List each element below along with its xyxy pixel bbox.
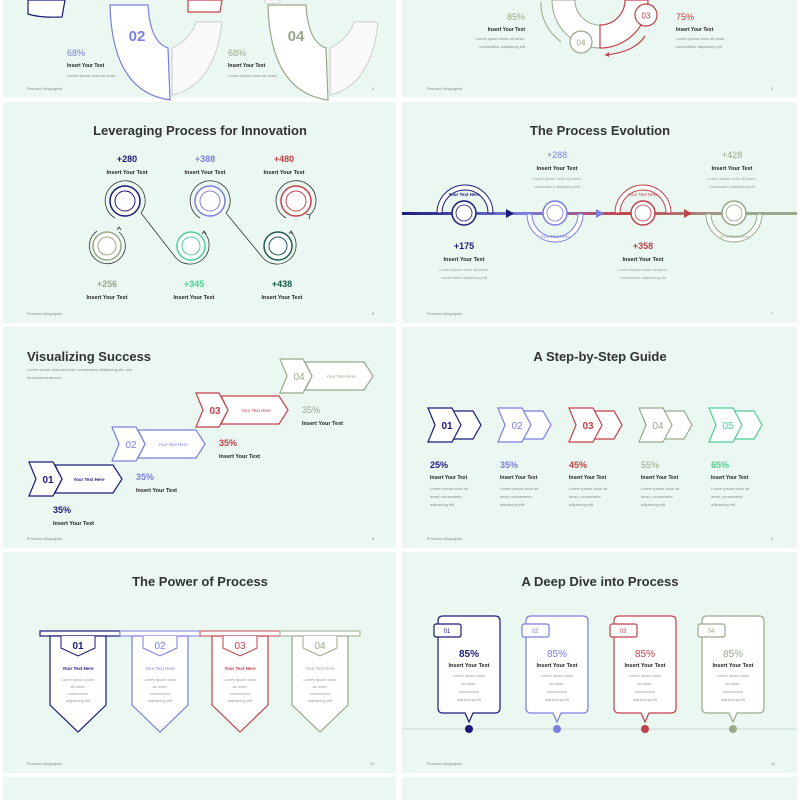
title: Visualizing Success [27,349,151,364]
text: 68% right [228,48,277,78]
slide 8: Visualizing Success: 8 [372,536,375,541]
node +256: Insert Your Text [87,295,128,301]
node +256: +256 [97,279,117,289]
step 02: 02 [511,421,523,432]
label +175: Lorem ipsum dolor sit amet, [439,267,489,272]
step 05 [709,408,762,507]
pennant 02: 02 [154,641,166,652]
node 2: Your Text Here [540,234,570,239]
card 01: Lorem ipsum dolor [452,673,486,678]
slide 6: Leveraging Process for Innovation: 6 [372,311,375,316]
title: The Power of Process [132,574,268,589]
pennant 01: Lorem ipsum dolor [61,677,95,682]
slide 6: Leveraging Process for Innovation: Process Infographic [27,311,62,316]
ring chart: 03 [642,12,651,20]
pennant 01 [50,636,106,732]
card 03: Insert Your Text [625,663,666,669]
subtitle: Lorem ipsum dolor sit amet, consectetur adipiscing elit, sed [27,367,132,372]
slide 4: 4 [372,86,375,91]
pennant 03: adipiscing elit [228,698,253,703]
node 2 [527,201,583,242]
pennant 03 [212,636,268,732]
label +358: Insert Your Text [623,257,664,263]
step 03: Insert Your Text [219,454,260,460]
step 01: 01 [42,475,54,486]
label +428: +428 [722,150,742,160]
connector path [89,181,316,264]
step 04 [280,359,373,427]
node +256 [87,232,128,301]
node 4 [706,201,762,242]
title: Leveraging Process for Innovation [93,123,307,138]
slide 8: Visualizing Success [3,327,396,548]
pennant 02: Lorem ipsum dolor [143,677,177,682]
card 02: 02 [532,629,539,635]
card 04: adipiscing elit [721,697,746,702]
node +280: Insert Your Text [107,170,148,176]
card 04: sit amet, [725,681,741,686]
slide 9: A Step-by-Step Guide: Process Infographic [427,536,462,541]
node 1 [437,185,493,225]
node +345 [174,232,215,301]
step 03 [569,408,622,507]
text: 75%: Lorem ipsum dolor sit amet, [676,36,725,41]
step 02 [112,427,205,494]
step 01 [29,462,122,527]
pennant 03: Your Text Here [224,666,256,671]
title: A Step-by-Step Guide [533,349,667,364]
text: 68% left: 68% [67,48,85,58]
card 02: Insert Your Text [537,663,578,669]
step 02: Insert Your Text [500,475,538,481]
card 03: Lorem ipsum dolor [628,673,662,678]
step 04: Your Text Here [326,374,356,379]
card 02 [522,616,588,733]
node +480: Insert Your Text [264,170,305,176]
card 04: 04 [708,629,715,635]
pennant 04: sit amet, [312,684,328,689]
step 04: 04 [293,372,305,383]
node +438: +438 [272,279,292,289]
node 4: Your Text Here [719,234,749,239]
text: 68% right: Lorem ipsum dolor sit amet, [228,73,277,78]
node +345: Insert Your Text [174,295,215,301]
step 05: 05 [722,421,734,432]
pennant 03: consectetur [230,691,251,696]
step 03: 45% [569,460,587,470]
step 02: adipiscing elit [500,502,525,507]
text: 85% [476,12,526,49]
card 03: 03 [620,629,627,635]
pennant 01: sit amet, [70,684,86,689]
step 02: 35% [500,460,518,470]
label +358 [618,241,668,280]
text: 68% right: 68% [228,48,246,58]
ring chart: 04 [577,38,586,48]
pennant 03: sit amet, [232,684,248,689]
label +358: consectetur adipiscing elit [620,275,667,280]
card 02: adipiscing elit [545,697,570,702]
subtitle [27,367,132,380]
step 02: 35% [136,472,154,482]
card 03: 85% [635,649,655,660]
slide 7: The Process Evolution: Process Infographic [427,311,462,316]
slide 4 [3,0,396,100]
label +175: +175 [454,241,474,251]
slide 5: Process Infographic [427,86,462,91]
pennant 01: consectetur [68,691,89,696]
card 01: 01 [444,629,451,635]
pennant 01: 01 [72,641,84,652]
node +280 [107,154,148,216]
step 05: Lorem ipsum dolor sit [711,486,750,491]
card 02: 85% [547,649,567,660]
bottom partial slides [3,777,797,800]
slide 9: A Step-by-Step Guide [402,327,797,548]
node +388: Insert Your Text [185,170,226,176]
segment: 04 [268,5,328,100]
step 01: Insert Your Text [53,521,94,527]
node +480: +480 [274,154,294,164]
card 01: 85% [459,649,479,660]
card 02: Lorem ipsum dolor [540,673,574,678]
subtitle: do eiusmod tempor [27,375,62,380]
text: 68% left: Lorem ipsum dolor sit amet, [67,73,116,78]
slide 5 [402,0,797,97]
node +280: +280 [117,154,137,164]
step 01: Insert Your Text [430,475,468,481]
step 03: Your Text Here [241,408,271,413]
card 04: Insert Your Text [713,663,754,669]
step 02: 02 [125,440,137,451]
text: 68% right: Insert Your Text [228,63,266,69]
step 03: amet, consectetur [569,494,601,499]
label +288: Insert Your Text [537,166,578,172]
pennant 02: sit amet, [152,684,168,689]
slide 8: Visualizing Success: Process Infographic [27,536,62,541]
step 02: Insert Your Text [136,488,177,494]
step 03 [196,393,288,460]
slide 11: A Deep Dive into Process: 11 [771,761,776,766]
node +345: +345 [184,279,204,289]
slide 5: 5 [771,86,774,91]
card 01: Insert Your Text [449,663,490,669]
node 1: Your Text Here [448,192,480,197]
step 03: Lorem ipsum dolor sit [569,486,608,491]
node 3: Your Text Here [628,192,658,197]
slide 10: The Power of Process: 10 [370,761,375,766]
node +480 [264,154,311,216]
step 04: amet, consectetur [641,494,673,499]
title: The Process Evolution [530,123,670,138]
card 03: consectetur [635,689,656,694]
pennant 02: consectetur [150,691,171,696]
pennant 01: Your Text Here [62,666,94,671]
card 01: adipiscing elit [457,697,482,702]
ring chart [541,0,657,57]
slide 4: Process Infographic [27,86,62,91]
label +428 [707,150,757,189]
step 03: Insert Your Text [569,475,607,481]
step 03: 35% [219,438,237,448]
step 02 [498,408,551,507]
label +175: Insert Your Text [444,257,485,263]
pennant 03: 03 [234,641,246,652]
card 02: consectetur [547,689,568,694]
slide 9: A Step-by-Step Guide: 9 [771,536,774,541]
text: 75%: consectetur adipiscing elit [676,44,723,49]
step 05: adipiscing elit [711,502,736,507]
step 04: Lorem ipsum dolor sit [641,486,680,491]
card 04: 85% [723,649,743,660]
label +288: Lorem ipsum dolor sit amet, [532,176,582,181]
pennant 03: Lorem ipsum dolor [223,677,257,682]
step 01: 25% [430,460,448,470]
card 03: sit amet, [637,681,653,686]
node +438: Insert Your Text [262,295,303,301]
node +388 [185,154,226,216]
label +288: consectetur adipiscing elit [534,184,581,189]
node 3 [615,185,671,225]
step 02: amet, consectetur [500,494,532,499]
label +358: +358 [633,241,653,251]
pennant 04: Lorem ipsum dolor [303,677,337,682]
card 02: sit amet, [549,681,565,686]
step 02: Lorem ipsum dolor sit [500,486,539,491]
slide 11: A Deep Dive into Process: Process Infographic [427,761,462,766]
step 02: Your Text Here [158,442,188,447]
title: A Deep Dive into Process [521,574,679,589]
text: 85%: 85% [507,12,525,22]
card 01 [434,616,500,733]
pennant 04: 04 [314,641,326,652]
label +288: +288 [547,150,567,160]
text: 75% [676,12,725,49]
pennant 04: consectetur [310,691,331,696]
text: 85%: Lorem ipsum dolor sit amet, [476,36,525,41]
segment: 04: 04 [288,28,305,45]
label +288 [532,150,582,189]
segment: 02 [110,5,170,100]
card 03: adipiscing elit [633,697,658,702]
step 04 [639,408,692,507]
pennant 02 [132,636,188,732]
segment: 02: 02 [129,28,145,45]
step 04: 35% [302,405,320,415]
step 04: 55% [641,460,659,470]
label +358: Lorem ipsum dolor sit amet, [618,267,668,272]
step 01: adipiscing elit [430,502,455,507]
node +438 [262,232,303,301]
step 04: adipiscing elit [641,502,666,507]
step 01: 35% [53,505,71,515]
pennant 01: adipiscing elit [66,698,91,703]
label +175: consectetur adipiscing elit [441,275,488,280]
text: 68% left: Insert Your Text [67,63,105,69]
card 01: consectetur [459,689,480,694]
text: 75%: Insert Your Text [676,27,714,33]
card 01: sit amet, [461,681,477,686]
slide 7: The Process Evolution: 7 [771,311,774,316]
label +175 [439,241,489,280]
pennant 02: adipiscing elit [148,698,173,703]
step 05: Insert Your Text [711,475,749,481]
segment: 01 piece [28,0,65,17]
slide 7: The Process Evolution [402,102,797,323]
pennant 04: adipiscing elit [308,698,333,703]
card 04: Lorem ipsum dolor [716,673,750,678]
node +388: +388 [195,154,215,164]
step 05: amet, consectetur [711,494,743,499]
card 03 [610,616,676,733]
label +428: consectetur adipiscing elit [709,184,756,189]
step 03: 03 [582,421,594,432]
step 01: amet, consectetur [430,494,462,499]
step 04: Insert Your Text [302,421,343,427]
step 01: 01 [441,421,453,432]
step 05: 65% [711,460,729,470]
step 01: Lorem ipsum dolor sit [430,486,469,491]
slide 6: Leveraging Process for Innovation [3,102,396,323]
text: 85%: Insert Your Text [488,27,525,33]
slide 10: The Power of Process: Process Infographic [27,761,62,766]
text: 75%: 75% [676,12,694,22]
step 04: Insert Your Text [641,475,679,481]
label +428: Insert Your Text [712,166,753,172]
text: 85%: consectetur adipiscing elit [479,44,526,49]
step 03: 03 [209,406,221,417]
card 04: consectetur [723,689,744,694]
card 04 [698,616,764,733]
step 01: Your Text Here [73,477,105,482]
step 01 [428,408,481,507]
timeline line [402,212,797,215]
text: 68% left [67,48,116,78]
label +428: Lorem ipsum dolor sit amet, [707,176,757,181]
slide 10: The Power of Process [3,552,396,773]
pennant 04: Your Text Here [305,666,335,671]
step 04: 04 [652,421,664,432]
top bar [40,631,360,636]
step 03: adipiscing elit [569,502,594,507]
slide 11: A Deep Dive into Process [402,552,797,773]
pennant 04 [292,636,348,732]
pennant 02: Your Text Here [145,666,175,671]
